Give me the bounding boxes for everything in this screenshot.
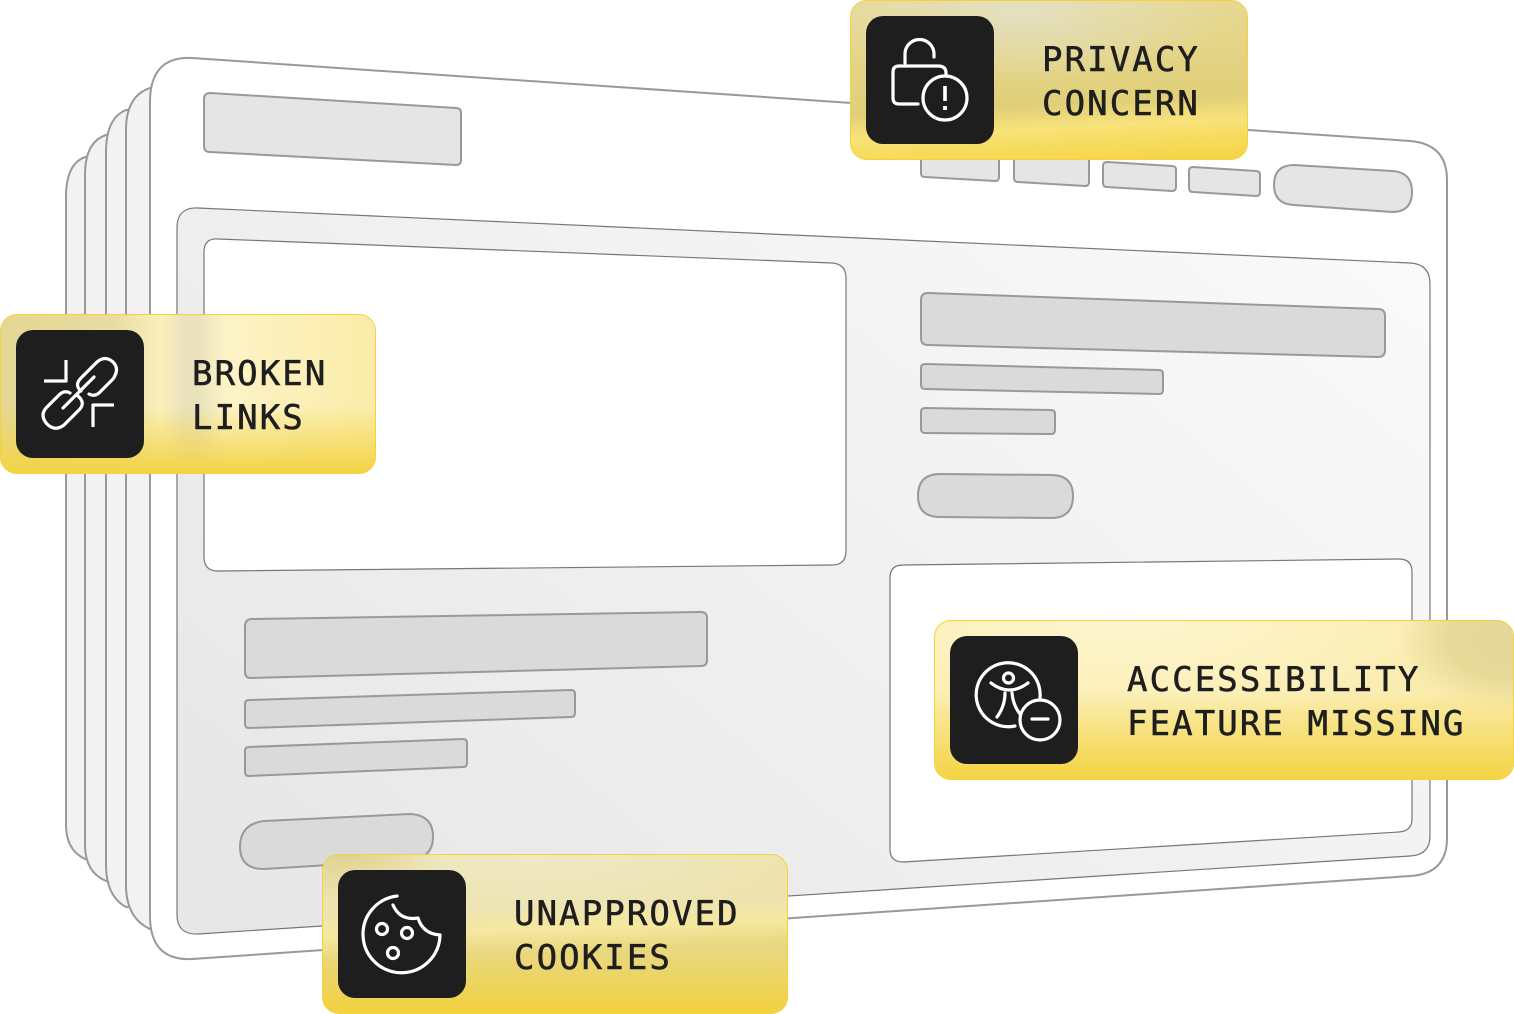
label: ACCESSIBILITY [1127,660,1420,700]
right text placeholders [918,293,1385,518]
label: COOKIES [514,938,672,978]
main page [150,58,1447,959]
badge: accessibility feature missing [934,620,1514,780]
content panel [177,208,1430,934]
label: UNAPPROVED [514,894,740,934]
icon: bitten cookie [338,870,466,998]
back pages [66,88,170,929]
label [514,894,740,978]
label: LINKS [192,398,305,438]
lower-left text placeholders [240,612,707,869]
icon: lock with alert [866,16,994,144]
header logo placeholder [204,93,461,165]
label: BROKEN [192,354,327,394]
lower-right image placeholder [890,559,1412,862]
label: FEATURE MISSING [1127,704,1466,744]
badge: privacy concern [850,0,1248,160]
label [1127,660,1466,744]
badge: broken links [0,314,376,474]
label [192,354,327,438]
navigation placeholders [921,150,1412,212]
badge: unapproved cookies [322,854,788,1014]
label [1042,40,1200,124]
icon: broken chain link [16,330,144,458]
icon: accessibility figure with minus [950,636,1078,764]
hero image placeholder [204,239,846,571]
label: PRIVACY [1042,40,1200,80]
label: CONCERN [1042,84,1200,124]
